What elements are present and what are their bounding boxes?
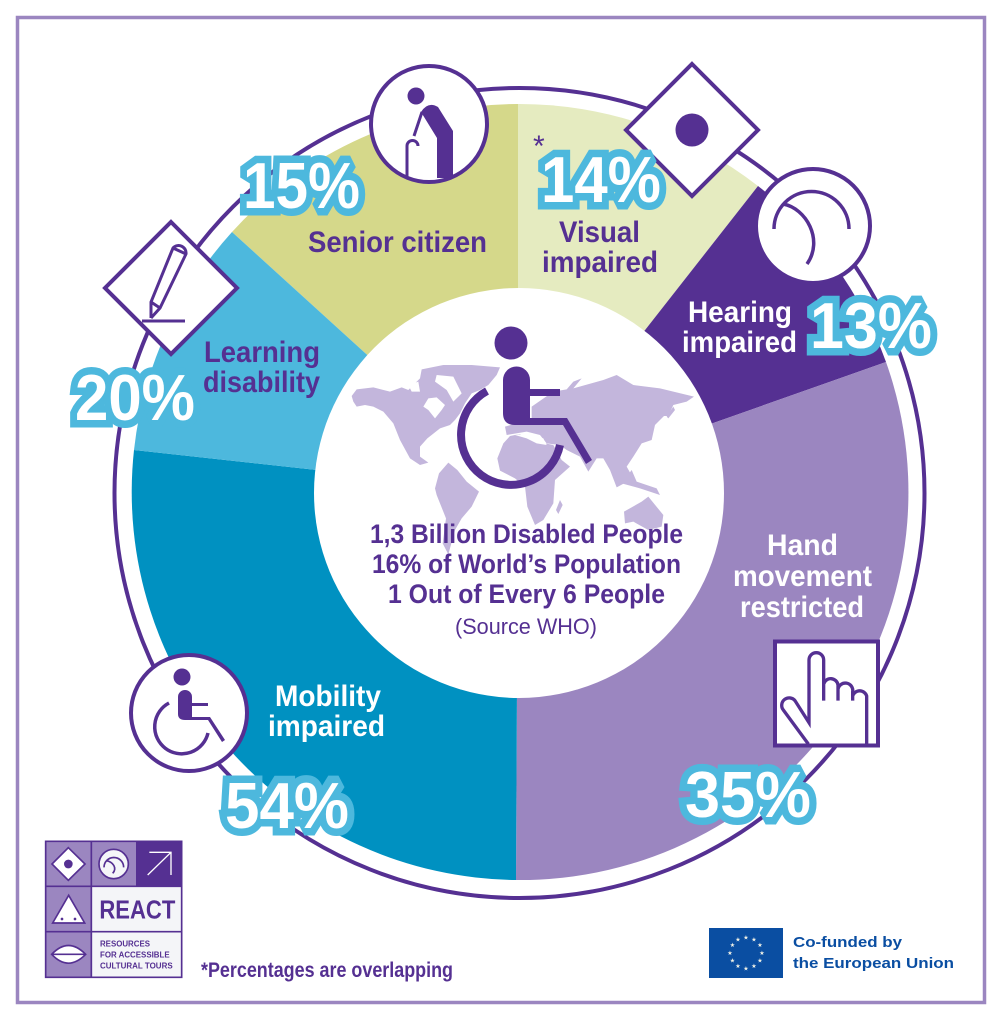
EU flag <box>709 928 783 978</box>
label: hearing impaired: impaired <box>682 326 797 359</box>
world map <box>352 365 694 554</box>
label: mobility impaired <box>268 680 385 743</box>
label: learning disability <box>203 336 320 399</box>
label: visual impaired: Visual <box>559 216 640 249</box>
map: mediterranean <box>515 433 547 445</box>
label: mobility impaired: Mobility <box>275 680 381 713</box>
stat line 3: 1 Out of Every 6 People <box>388 579 665 609</box>
percent: 13: 13% <box>810 289 932 362</box>
REACT logo: RESOURCES <box>100 939 150 949</box>
icon: hearing circle <box>756 169 870 283</box>
REACT logo <box>46 841 182 977</box>
wheelchair head <box>494 326 528 360</box>
asterisk: * <box>533 130 545 163</box>
EU co-funding text: the European Union <box>793 955 954 972</box>
EU flag: ★ <box>735 963 741 970</box>
segment: senior citizen <box>232 104 518 492</box>
REACT logo: REACT <box>99 894 175 924</box>
icon: large wheelchair user <box>461 326 592 485</box>
segment: hand movement restricted <box>516 362 908 880</box>
donut chart <box>132 104 908 880</box>
percent: 14: 14% <box>541 143 661 216</box>
wheelchair wheel <box>461 391 560 485</box>
map: madagascar <box>556 500 563 514</box>
map: eurasia <box>505 375 694 487</box>
label: hand movement restricted: Hand <box>767 529 838 562</box>
EU flag: ★ <box>743 966 749 972</box>
map: africa <box>497 434 570 525</box>
EU flag: ★ <box>743 934 749 942</box>
stat line 1: 1,3 Billion Disabled People <box>370 519 683 549</box>
icon: pencil diamond <box>105 222 237 354</box>
centre circle <box>314 288 724 698</box>
outer ring <box>114 88 924 898</box>
label: mobility impaired: impaired <box>268 710 385 743</box>
REACT logo: CULTURAL TOURS <box>100 961 173 971</box>
EU flag: ★ <box>735 936 741 944</box>
EU flag: ★ <box>757 942 763 949</box>
percent: 15: 15% <box>243 149 360 222</box>
segment: hearing impaired <box>518 186 886 492</box>
EU flag: ★ <box>727 950 733 957</box>
map: north america and greenland <box>352 365 500 465</box>
source note: (Source WHO) <box>455 614 597 639</box>
label: visual impaired <box>542 216 658 279</box>
EU flag: ★ <box>757 958 763 964</box>
map: islands <box>667 407 675 418</box>
label: learning disability: Learning <box>204 336 320 369</box>
EU co-funding text: Co-funded by <box>793 934 903 951</box>
REACT logo: FOR ACCESSIBLE <box>100 950 170 960</box>
segment: learning disability <box>134 232 518 492</box>
icon: senior citizen <box>371 66 487 182</box>
segment: visual impaired <box>518 104 758 492</box>
wheelchair body <box>503 366 592 464</box>
icon: hand square <box>775 642 878 746</box>
map: south america <box>435 463 479 554</box>
map: australia <box>624 497 663 530</box>
map: hudson bay <box>408 375 462 418</box>
percent: 20: 20% <box>75 361 195 434</box>
label: hand movement restricted <box>733 529 872 624</box>
EU flag: ★ <box>751 963 757 970</box>
icon: mobility circle <box>131 655 247 771</box>
label: senior citizen: Senior citizen <box>308 226 487 259</box>
stat line 2: 16% of World’s Population <box>372 549 681 579</box>
EU flag: ★ <box>730 942 735 949</box>
label: hearing impaired: Hearing <box>688 296 792 329</box>
EU flag: ★ <box>751 936 757 944</box>
EU flag: ★ <box>730 958 735 964</box>
footnote: *Percentages are overlapping <box>201 959 453 982</box>
percent: 54: 54% <box>225 769 349 842</box>
map: southeast asia <box>622 470 660 495</box>
icon: visual diamond <box>626 64 758 196</box>
EU co-funding text <box>793 934 954 972</box>
label: visual impaired: impaired <box>542 246 658 279</box>
percent: 35: 35% <box>685 758 811 831</box>
EU flag: ★ <box>759 950 765 957</box>
label: hearing impaired <box>682 296 797 359</box>
label: hand movement restricted: restricted <box>740 591 864 624</box>
label: hand movement restricted: movement <box>733 560 872 593</box>
segment: mobility impaired <box>132 450 518 880</box>
label: learning disability: disability <box>203 366 320 399</box>
centre statistics text <box>370 519 683 639</box>
